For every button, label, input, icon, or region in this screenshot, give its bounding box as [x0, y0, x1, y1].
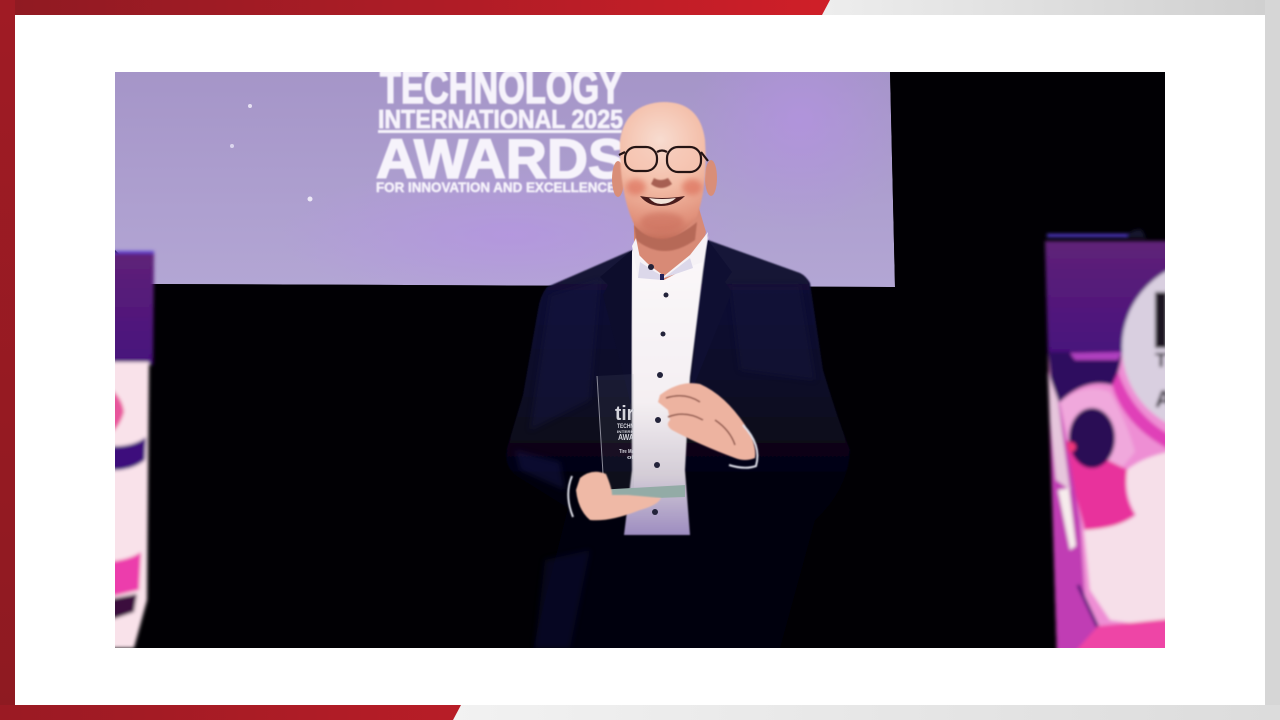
banner logo circle: [1118, 268, 1165, 424]
mouth and smile: [640, 196, 685, 206]
ears: [612, 161, 624, 197]
ring around banner circle: [1110, 371, 1165, 449]
screen text: awards logo: [376, 72, 624, 194]
nose shadow: [651, 178, 672, 188]
lapels: [600, 250, 632, 405]
dark hole: [1069, 408, 1115, 468]
screen text: awards logo: AWARDS: [376, 127, 626, 190]
shirt: [624, 236, 708, 535]
right banner: [1042, 228, 1165, 648]
banner logo circle: T: [1155, 350, 1167, 372]
screen text: awards logo: TECHNOLOGY: [380, 61, 622, 113]
glasses: [619, 147, 708, 172]
right hand: [658, 383, 757, 468]
left strip: [1048, 372, 1100, 655]
trophy label: of: [627, 455, 634, 461]
trophy label: AWA: [618, 433, 634, 442]
left banner: [115, 248, 157, 648]
trophy label: tir: [615, 403, 634, 425]
cheek flush: [626, 179, 702, 232]
trophy label: [615, 403, 634, 461]
suit jacket: [506, 240, 850, 648]
neck shadow: [634, 222, 697, 251]
trophy label: INTERN: [617, 429, 634, 434]
shirt buttons: [648, 264, 668, 515]
shirt collar: [632, 232, 708, 278]
photo panel: [115, 72, 1165, 648]
jacket highlights: [515, 325, 809, 648]
magenta area: [1066, 440, 1135, 530]
dark upper shape: [1048, 352, 1122, 402]
left hand holding trophy: [568, 472, 661, 520]
trophy: [597, 374, 685, 500]
trophy label: TECHN: [617, 424, 634, 430]
screen text: awards logo: INTERNATIONAL 2025: [378, 104, 623, 134]
projection screen: [115, 72, 895, 287]
pale lower shape: [1082, 450, 1165, 626]
trophy label: Tire Ma: [619, 449, 634, 455]
neck: [634, 205, 706, 280]
pale ring: [1060, 389, 1135, 470]
banner logo circle: A: [1155, 386, 1172, 413]
person: man in suit: [506, 102, 850, 648]
screen text: awards logo: FOR INNOVATION AND EXCELLENCE: [376, 179, 616, 195]
head: [620, 102, 706, 239]
